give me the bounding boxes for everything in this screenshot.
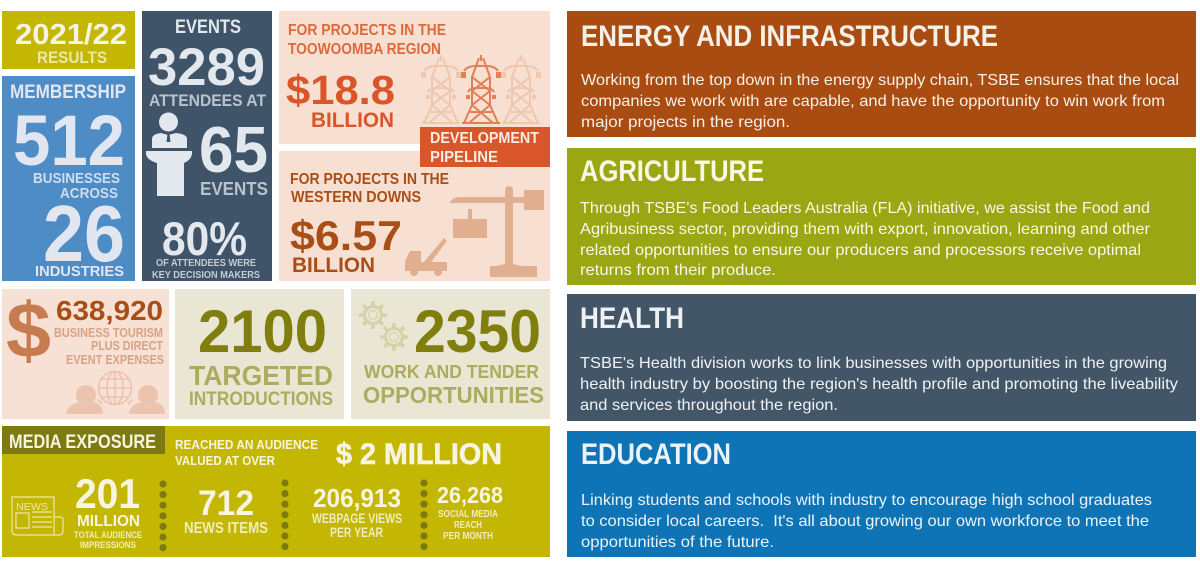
text: Toowoomba projects: FOR PROJECTS IN THE	[288, 22, 446, 39]
panel: media exposure	[2, 426, 550, 557]
text: business tourism expenses	[54, 325, 164, 367]
text: energy description	[581, 72, 1179, 131]
stat: 2100: 2100	[198, 298, 327, 365]
text: agriculture description: related opportunities to ensure our producers and processors receive optimal	[580, 242, 1141, 259]
stat: 80% decision makers: OF ATTENDEES WERE	[156, 257, 256, 269]
label: results: RESULTS	[37, 49, 107, 67]
text: reached an audience	[175, 437, 318, 468]
label: targeted introductions: INTRODUCTIONS	[189, 389, 333, 410]
stat: 80% decision makers: KEY DECISION MAKERS	[152, 269, 260, 281]
stat: 512 businesses: 512	[13, 102, 125, 181]
text: health description: health industry by boosting the region's health profile and promoting the liveability	[580, 376, 1178, 393]
stat: $6.57 billion: BILLION	[292, 254, 375, 277]
stat: $2 million: $ 2 MILLION	[336, 438, 502, 471]
text: energy description: Working from the top down in the energy supply chain, TSBE ensures that the local	[581, 72, 1179, 89]
stat: 201 million impressions: IMPRESSIONS	[80, 540, 136, 551]
text: business tourism expenses: EVENT EXPENSES	[66, 352, 164, 367]
text: reached an audience: VALUED AT OVER	[175, 453, 276, 468]
panel: targeted introductions	[175, 289, 344, 419]
panel: Toowoomba pipeline	[279, 11, 550, 144]
text: agriculture description: Agribusiness sector, providing them with export, innovation, learning and other	[580, 221, 1151, 238]
text: education description: to consider local careers. It's all about growing our own workforce to meet the	[581, 513, 1149, 530]
stat: 65 events: 65	[199, 113, 268, 186]
panel: work and tender opportunities	[351, 289, 550, 419]
label: work and tender opportunities	[363, 362, 544, 408]
stat: $6.57 billion: $6.57	[290, 212, 402, 259]
label: work and tender opportunities: WORK AND TENDER	[364, 362, 539, 382]
stat: 201 million impressions	[74, 470, 142, 551]
text: education description: opportunities of the future.	[581, 534, 774, 551]
panel: Western Downs pipeline	[279, 151, 550, 281]
stat: $18.8 billion	[286, 67, 395, 132]
stat: 206,913 webpage views: 206,913	[313, 483, 401, 513]
stat: 2350: 2350	[414, 298, 541, 365]
text: Toowoomba projects	[288, 22, 446, 58]
label: work and tender opportunities: OPPORTUNITIES	[363, 382, 544, 408]
tag: development pipeline: PIPELINE	[430, 149, 498, 166]
stat: 26 industries: 26	[43, 189, 125, 278]
text: health description: TSBE's Health division works to link businesses with opportunities in the growing	[580, 355, 1167, 372]
stat: 512 businesses: BUSINESSES	[33, 170, 120, 187]
stat: 638,920: 638,920	[56, 295, 163, 326]
tag: development pipeline: DEVELOPMENT	[430, 130, 539, 147]
stat: 712 news items	[184, 484, 268, 537]
heading: media exposure: MEDIA EXPOSURE	[9, 432, 156, 453]
stat: 206,913 webpage views: WEBPAGE VIEWS	[312, 511, 402, 526]
text: agriculture description: Through TSBE's Food Leaders Australia (FLA) initiative, we assist the Food and	[580, 200, 1150, 217]
stat: 206,913 webpage views: PER YEAR	[330, 525, 383, 540]
text: business tourism expenses: BUSINESS TOURISM	[54, 325, 163, 340]
text: Toowoomba projects: TOOWOOMBA REGION	[288, 41, 441, 58]
text: Western Downs projects	[290, 171, 449, 206]
panel: health	[567, 294, 1196, 421]
stat: 26,268 social media	[437, 482, 503, 542]
panel: 2021/22 results	[2, 11, 135, 69]
panel: membership	[2, 76, 135, 281]
text: education description: Linking students and schools with industry to encourage high school graduates	[581, 492, 1152, 509]
text: agriculture description	[580, 200, 1151, 279]
label: targeted introductions: TARGETED	[189, 360, 333, 391]
stat: $18.8 billion: BILLION	[311, 109, 394, 132]
heading: 2021/22: 2021/22	[15, 19, 127, 51]
text: health description	[580, 355, 1178, 414]
stat: 80% decision makers	[152, 212, 260, 281]
stat: 3289 attendees: ATTENDEES AT	[149, 91, 267, 110]
text: energy description: companies we work with are capable, and have the opportunity to win work from	[581, 93, 1165, 110]
text: Western Downs projects: WESTERN DOWNS	[291, 189, 421, 206]
stat: 201 million impressions: TOTAL AUDIENCE	[74, 530, 142, 541]
text: energy description: major projects in the region.	[581, 114, 790, 131]
text: business tourism expenses: PLUS DIRECT	[91, 338, 163, 353]
heading: education: EDUCATION	[581, 438, 731, 471]
stat: 26,268 social media: SOCIAL MEDIA	[438, 509, 498, 520]
panel: events	[142, 11, 272, 281]
label: targeted introductions	[189, 360, 333, 410]
panel: education	[567, 431, 1196, 557]
stat: 26 industries: INDUSTRIES	[35, 263, 124, 280]
heading: health: HEALTH	[580, 302, 684, 335]
icon: dollar sign: $	[6, 286, 51, 374]
icon: truck	[405, 238, 447, 276]
stat: 712 news items: NEWS ITEMS	[184, 520, 268, 537]
text: Western Downs projects: FOR PROJECTS IN THE	[290, 171, 449, 188]
stat: $18.8 billion: $18.8	[286, 67, 395, 113]
icon: people and globe	[66, 372, 165, 414]
stat: 712 news items: 712	[198, 484, 254, 523]
tag: development pipeline	[420, 127, 550, 167]
heading: agriculture: AGRICULTURE	[580, 155, 764, 188]
panel: energy and infrastructure	[567, 11, 1196, 137]
stat: 512 businesses: ACROSS	[60, 185, 118, 202]
stat: 80% decision makers: 80%	[162, 212, 247, 265]
heading: events: EVENTS	[175, 17, 241, 38]
panel: agriculture	[567, 148, 1196, 285]
stat: 26,268 social media: REACH	[454, 520, 482, 531]
stat: 26,268 social media: 26,268	[437, 482, 503, 508]
stat: 3289 attendees: 3289	[148, 38, 265, 97]
stat: 26,268 social media: PER MONTH	[443, 531, 493, 542]
icon: newspaper: NEWS	[16, 501, 48, 513]
stat: $6.57 billion	[290, 212, 402, 277]
stat: 201 million impressions: MILLION	[77, 513, 140, 530]
panel: business tourism	[2, 286, 169, 419]
stat: 201 million impressions: 201	[75, 470, 140, 517]
heading: media exposure	[2, 426, 165, 454]
heading: membership: MEMBERSHIP	[10, 82, 126, 103]
icon: gears	[359, 301, 408, 351]
text: health description: and services throughout the region.	[580, 397, 838, 414]
icon: crane	[450, 186, 544, 277]
icon: newspaper	[12, 497, 63, 535]
icon: transmission towers	[421, 55, 541, 123]
stat: 206,913 webpage views	[312, 483, 402, 540]
heading: energy and infrastructure: ENERGY AND INFRASTRUCTURE	[581, 20, 998, 53]
icon: speaker at lectern	[146, 112, 192, 196]
text: education description	[581, 492, 1152, 551]
text: reached an audience: REACHED AN AUDIENCE	[175, 437, 318, 452]
text: agriculture description: returns from their produce.	[580, 262, 776, 279]
stat: 65 events: EVENTS	[200, 179, 268, 199]
